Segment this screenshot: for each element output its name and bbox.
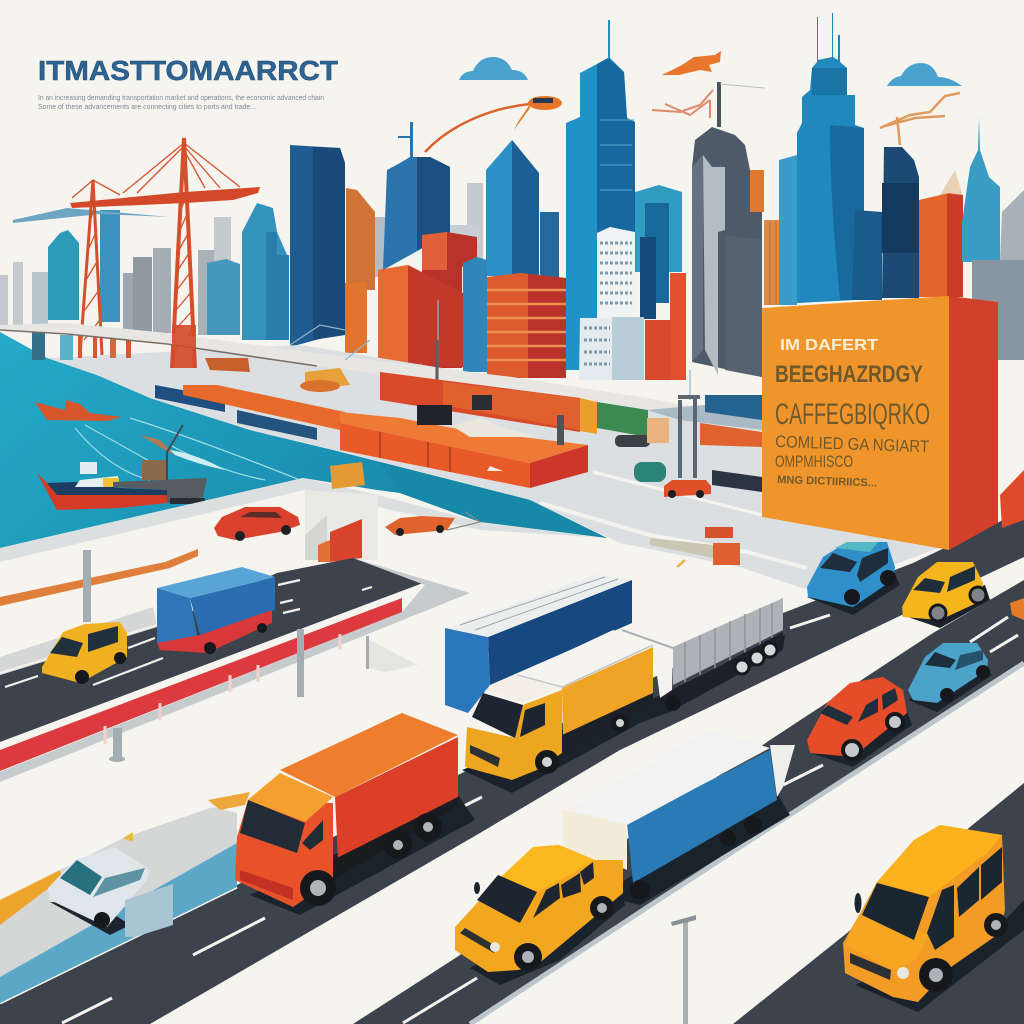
middle road bbox=[353, 580, 1024, 1024]
title: ITMASTTOMAARRCT bbox=[38, 55, 338, 86]
building: dark blue tower bbox=[290, 145, 345, 347]
white trailer truck bbox=[620, 598, 785, 730]
building: upper red block bbox=[422, 232, 477, 368]
small red car bbox=[664, 480, 711, 497]
building: left teal tower bbox=[48, 230, 79, 320]
plane top bbox=[662, 51, 721, 75]
distant vehicles bbox=[615, 435, 650, 447]
bridge bbox=[0, 300, 762, 432]
building: tallest blue tower bbox=[566, 20, 635, 370]
crane: near mast bbox=[123, 138, 240, 368]
building: thin orange bbox=[345, 282, 367, 353]
building: orange behind bbox=[346, 188, 375, 290]
orange panel bbox=[762, 296, 998, 550]
centre orange blocks bbox=[345, 232, 566, 378]
orange band under bridge bbox=[380, 372, 580, 432]
green containers bbox=[597, 402, 648, 437]
road curb bbox=[470, 663, 1024, 1024]
panel heading: IM DAFERT bbox=[780, 337, 878, 354]
ship: cargo ship bbox=[37, 425, 207, 510]
building: spire right bbox=[962, 117, 1000, 262]
posts bbox=[83, 550, 369, 762]
building: navy tower bbox=[882, 147, 919, 298]
shadow bbox=[462, 695, 660, 793]
building: antenna tower bbox=[383, 122, 450, 270]
building: striped orange block bbox=[487, 273, 566, 378]
panel text lines bbox=[775, 361, 930, 489]
water wake bbox=[75, 418, 300, 480]
title: Some of these advancements are connecting cities to ports and trade... bbox=[38, 102, 256, 111]
dark machinery bbox=[417, 405, 452, 425]
yellow car right bbox=[902, 562, 990, 628]
panel text lines: BEEGHAZRDGY bbox=[775, 361, 923, 388]
shadow bbox=[600, 790, 790, 905]
water bbox=[0, 332, 607, 548]
navy container truck bbox=[445, 575, 632, 713]
orange slab bbox=[183, 385, 345, 430]
crates bbox=[705, 527, 733, 538]
road curb band bbox=[0, 607, 157, 675]
dark truck bbox=[712, 470, 762, 492]
flying craft with trail bbox=[425, 104, 530, 152]
building: tall blue right bbox=[779, 155, 797, 305]
building: striped orange bbox=[764, 220, 792, 305]
port ground bbox=[47, 345, 1000, 590]
panel text lines: COMLIED GA NGIART bbox=[775, 432, 929, 456]
building: crane-side blue tower bbox=[100, 210, 120, 322]
crane: far mast bbox=[72, 180, 120, 355]
wisps by grey tower bbox=[652, 90, 713, 118]
large container block bbox=[340, 423, 530, 488]
wedge water shade bbox=[380, 462, 607, 538]
building: blue narrow bbox=[463, 257, 487, 372]
shadow bbox=[620, 635, 785, 730]
left road bbox=[0, 558, 423, 742]
title bbox=[38, 55, 338, 111]
ship: small orange boat bbox=[35, 400, 122, 421]
left blue towers bbox=[48, 122, 559, 347]
slab lower left bbox=[0, 807, 237, 977]
bottom right road bbox=[733, 783, 1024, 1024]
far skyline bbox=[0, 183, 483, 335]
orange deck items bbox=[205, 358, 250, 372]
building: pale blue tower bbox=[207, 259, 240, 335]
aircraft bbox=[425, 51, 960, 152]
crane: blue jib bbox=[13, 208, 170, 223]
ledge bbox=[0, 478, 607, 562]
white car lower left bbox=[48, 847, 173, 937]
red car bbox=[214, 507, 300, 541]
building: grey right bbox=[996, 190, 1024, 360]
blue car mid right bbox=[908, 643, 992, 712]
concrete box bbox=[305, 462, 378, 562]
orange cable bbox=[0, 549, 198, 606]
yellow car bbox=[455, 845, 625, 985]
left red barrier bbox=[0, 598, 402, 771]
lane marks left bbox=[0, 580, 372, 687]
right skyline bbox=[566, 13, 1024, 380]
roadside sign bbox=[125, 884, 173, 937]
shadow bbox=[250, 795, 475, 915]
street lamp bbox=[671, 915, 696, 1024]
panel text lines: OMPMHISCO bbox=[775, 452, 853, 471]
building: white tower bbox=[597, 227, 635, 320]
panel text lines: MNG DICTIIRIICS... bbox=[777, 474, 877, 489]
teal tanker bbox=[634, 462, 666, 482]
port containers bbox=[155, 358, 762, 565]
red truck edge bbox=[1000, 470, 1024, 528]
orange car bbox=[385, 512, 480, 536]
gantry bbox=[678, 397, 700, 478]
cranes bbox=[13, 138, 260, 368]
blue truck bbox=[563, 730, 795, 905]
blue container truck bbox=[157, 567, 275, 654]
building: grey tower bbox=[692, 127, 762, 377]
wrench bbox=[647, 560, 685, 588]
clouds bbox=[459, 57, 962, 86]
crane: jib bbox=[70, 187, 260, 208]
wisps by navy tower bbox=[880, 93, 960, 145]
building: connecting blocks bbox=[852, 210, 882, 300]
yellow truck bbox=[462, 630, 660, 793]
main road bbox=[0, 510, 1024, 1024]
yellow van top left bbox=[42, 622, 127, 684]
red truck bbox=[235, 713, 475, 915]
lane markings bbox=[0, 615, 1018, 1023]
white ground bbox=[0, 490, 1024, 1024]
cargo stack on block bbox=[452, 418, 540, 437]
building: lower red block bbox=[378, 265, 463, 367]
red car mid right bbox=[807, 677, 912, 767]
building: centre spire bbox=[486, 140, 539, 276]
title: In an increasing demanding transportation market and operations, the economic advanced chain bbox=[38, 93, 324, 102]
small orange car edge bbox=[1010, 598, 1024, 620]
building: mid blue tower bbox=[242, 203, 288, 340]
building: orange right bbox=[940, 170, 962, 296]
panel text lines: CAFFEGBIQRKO bbox=[775, 398, 930, 431]
blue containers bbox=[155, 385, 225, 412]
yellow van lower right bbox=[843, 825, 1024, 1012]
blue van bbox=[807, 542, 900, 615]
building: teal group behind bbox=[635, 185, 682, 272]
